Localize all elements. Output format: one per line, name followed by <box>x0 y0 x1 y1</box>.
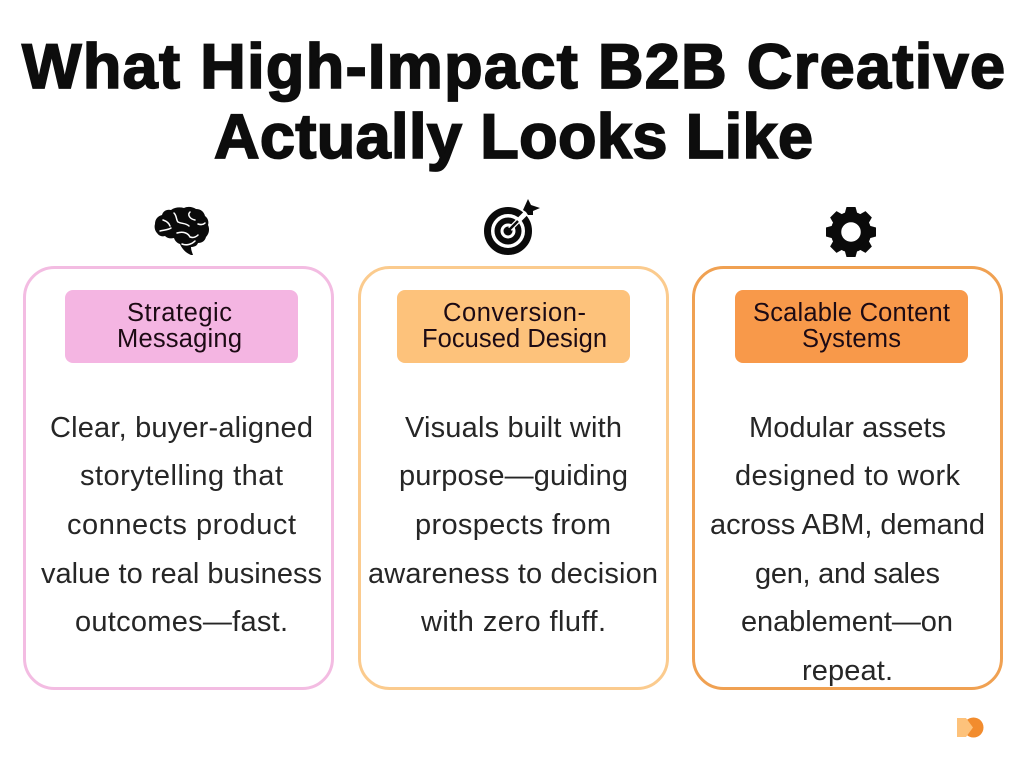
text: conversion-focused design description: purpose—guiding <box>399 460 628 492</box>
text: conversion-focused design description <box>368 412 658 638</box>
text: scalable content systems description: across ABM, demand <box>710 509 985 541</box>
panel: conversion-focused design <box>360 268 668 688</box>
panel: scalable content systems <box>694 268 1002 688</box>
text: scalable content systems description: Modular assets <box>749 412 946 444</box>
text: strategic messaging description: Clear, buyer-aligned <box>50 412 313 444</box>
label: conversion-focused design: Conversion- <box>443 299 586 327</box>
text: strategic messaging description: outcomes—fast. <box>75 606 288 638</box>
text: strategic messaging description: value to real business <box>41 558 322 590</box>
text: strategic messaging description: connects product <box>67 509 296 541</box>
text: conversion-focused design description: Visuals built with <box>405 412 622 444</box>
label: strategic messaging <box>65 290 298 363</box>
logo mark <box>957 718 984 738</box>
text: conversion-focused design description: prospects from <box>415 509 611 541</box>
title: Actually Looks Like <box>214 102 813 172</box>
text: scalable content systems description: repeat. <box>802 655 893 687</box>
text: scalable content systems description: designed to work <box>735 460 960 492</box>
text: strategic messaging description <box>41 412 322 638</box>
label: scalable content systems <box>735 290 968 363</box>
icon: gear <box>826 207 876 257</box>
text: conversion-focused design description: with zero fluff. <box>420 606 606 638</box>
label: conversion-focused design: Focused Design <box>422 325 607 353</box>
label: conversion-focused design <box>397 290 630 363</box>
panel: strategic messaging <box>24 268 332 688</box>
title <box>22 32 1005 172</box>
label: strategic messaging: Strategic <box>127 299 232 327</box>
label: strategic messaging: Messaging <box>117 325 242 353</box>
icon: target with arrow <box>488 199 540 252</box>
text: scalable content systems description: gen, and sales <box>755 558 940 590</box>
label: scalable content systems: Scalable Content <box>753 299 950 327</box>
title: What High-Impact B2B Creative <box>22 32 1005 102</box>
icon: brain <box>155 207 209 255</box>
text: conversion-focused design description: awareness to decision <box>368 558 658 590</box>
text: strategic messaging description: storytelling that <box>80 460 283 492</box>
text: scalable content systems description <box>710 412 985 687</box>
label: scalable content systems: Systems <box>802 325 901 353</box>
text: scalable content systems description: enablement—on <box>741 606 953 638</box>
